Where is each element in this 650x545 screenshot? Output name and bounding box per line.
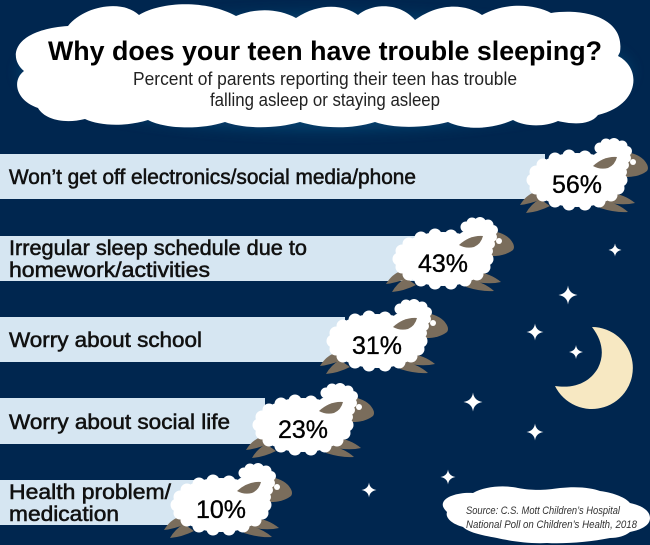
sheep 31%: 31% xyxy=(352,332,402,360)
sheep 31% xyxy=(320,299,448,374)
sheep 43% xyxy=(386,217,514,292)
sheep 23% xyxy=(246,383,374,458)
bar 3: school xyxy=(0,317,345,362)
subtitle: falling asleep or staying asleep xyxy=(210,90,440,110)
bar 2: irregular schedule: homework/activities xyxy=(9,259,210,282)
bar 5: health: medication xyxy=(9,503,119,526)
bar 5: health xyxy=(0,480,195,526)
title: Why does your teen have trouble sleeping? xyxy=(48,36,602,66)
bar 1: electronics xyxy=(0,154,545,199)
source cloud xyxy=(443,486,650,543)
sheep 23%: 23% xyxy=(278,416,328,444)
bar 5: health: Health problem/ xyxy=(9,481,171,504)
source text xyxy=(466,505,638,531)
sheep 10%: 10% xyxy=(196,496,246,524)
subtitle: Percent of parents reporting their teen has trouble xyxy=(133,69,517,89)
sheep 56%: 56% xyxy=(552,171,602,199)
bar 2: irregular schedule: Irregular sleep schedule due to xyxy=(9,237,307,260)
bar 4: social life xyxy=(0,398,265,444)
bar 1: electronics: Won’t get off electronics/social media/phone xyxy=(9,166,416,189)
subtitle xyxy=(133,69,517,110)
header cloud xyxy=(16,4,633,128)
bar 3: school: Worry about school xyxy=(9,329,202,352)
sheep 56% xyxy=(520,138,648,213)
sheep 43%: 43% xyxy=(418,250,468,278)
moon xyxy=(555,327,633,409)
stars xyxy=(362,244,622,498)
bar 2: irregular schedule xyxy=(0,236,430,282)
bar 4: social life: Worry about social life xyxy=(9,411,230,434)
sheep 10% xyxy=(164,463,292,538)
cloud glow xyxy=(20,14,630,130)
source text: Source: C.S. Mott Children’s Hospital xyxy=(466,505,620,517)
